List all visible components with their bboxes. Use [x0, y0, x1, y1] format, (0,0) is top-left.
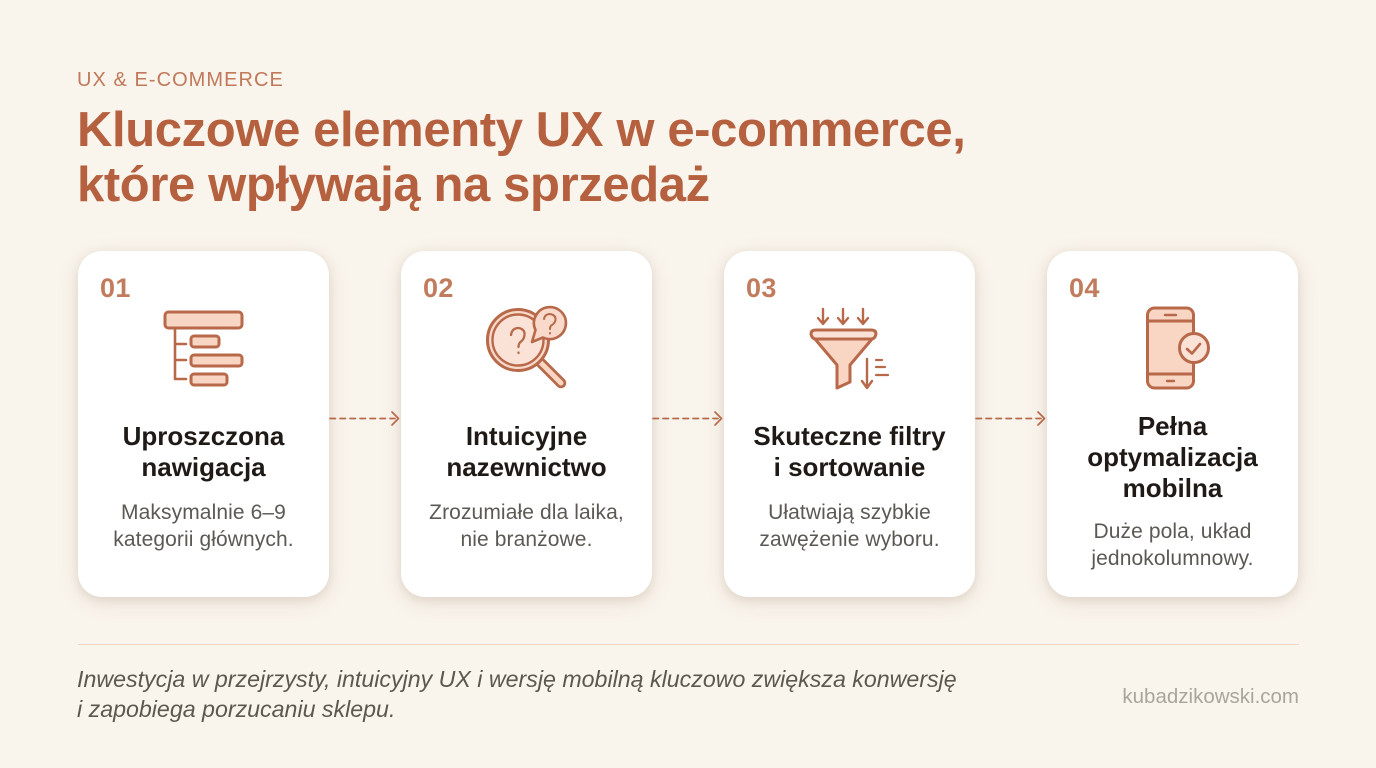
heading: card 03: Skuteczne filtry — [753, 421, 946, 451]
title: Kluczowe elementy UX w e-commerce, — [77, 103, 965, 157]
step number 04: 04 — [1069, 273, 1100, 303]
heading: card 04: Pełna — [1138, 411, 1207, 441]
panel: card 03 — [724, 251, 975, 597]
text: card 02: nie branżowe. — [460, 528, 593, 551]
icon: navigation tree — [165, 312, 242, 385]
text: card 04 — [1090, 520, 1254, 570]
icon: funnel with sort — [811, 309, 888, 388]
title — [77, 103, 965, 212]
heading: card 01 — [123, 421, 284, 482]
text: card 02 — [429, 501, 624, 551]
footer takeaway — [77, 666, 957, 722]
panel: card 01 — [78, 251, 329, 597]
arrow: 01 to 02 — [330, 412, 398, 425]
text: card 01: kategorii głównych. — [113, 528, 294, 551]
heading: card 01: nawigacja — [141, 452, 266, 482]
step number 01: 01 — [100, 273, 131, 303]
panel: card 04 — [1047, 251, 1298, 597]
footer takeaway: Inwestycja w przejrzysty, intuicyjny UX i wersję mobilną kluczowo zwiększa konwersję — [77, 666, 957, 692]
text: card 03 — [759, 501, 940, 551]
heading: card 04 — [1087, 411, 1258, 503]
text: card 04: Duże pola, układ — [1093, 520, 1252, 543]
heading: card 03: i sortowanie — [774, 452, 925, 482]
arrow: 03 to 04 — [976, 412, 1044, 425]
arrow: 02 to 03 — [653, 412, 722, 425]
eyebrow label: UX & E-COMMERCE — [77, 69, 284, 91]
text: card 01: Maksymalnie 6–9 — [121, 501, 286, 524]
text: card 03: zawężenie wyboru. — [759, 528, 940, 551]
text: card 04: jednokolumnowy. — [1091, 547, 1254, 570]
title: które wpływają na sprzedaż — [77, 158, 710, 212]
heading: card 01: Uproszczona — [123, 421, 284, 451]
heading: card 04: optymalizacja — [1087, 442, 1258, 472]
icon: magnifier with questions — [488, 307, 566, 383]
panel: card 02 — [401, 251, 652, 597]
source credit: kubadzikowski.com — [1122, 685, 1299, 708]
step number 03: 03 — [746, 273, 777, 303]
footer takeaway: i zapobiega porzucaniu sklepu. — [77, 696, 395, 722]
heading: card 04: mobilna — [1123, 473, 1222, 503]
text: card 01 — [113, 501, 294, 551]
step number 02: 02 — [423, 273, 454, 303]
heading: card 02 — [446, 421, 607, 482]
text: card 03: Ułatwiają szybkie — [768, 501, 931, 524]
heading: card 02: Intuicyjne — [466, 421, 587, 451]
text: card 02: Zrozumiałe dla laika, — [429, 501, 624, 524]
heading: card 02: nazewnictwo — [446, 452, 607, 482]
heading: card 03 — [753, 421, 946, 482]
icon: phone with check — [1148, 308, 1208, 388]
